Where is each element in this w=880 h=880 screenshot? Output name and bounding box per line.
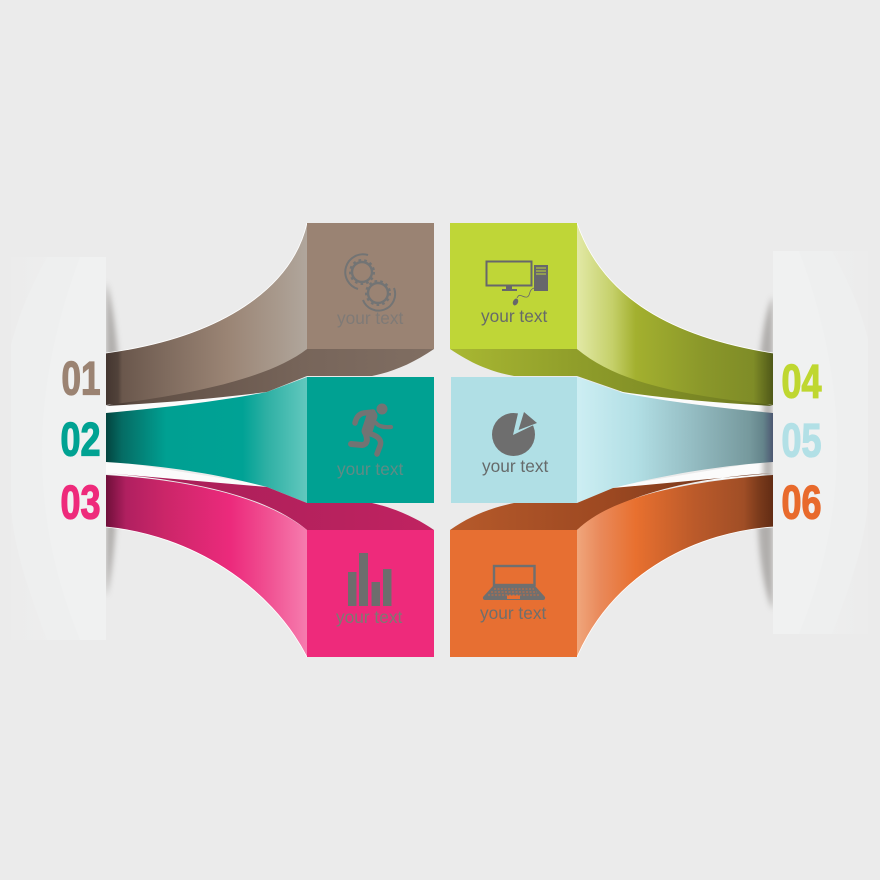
- box 02: [307, 377, 434, 503]
- number 04: 04: [782, 354, 822, 408]
- number 02: 02: [60, 412, 100, 466]
- box 05: [451, 377, 577, 503]
- ribbon 04: [450, 223, 773, 406]
- box 03: [307, 530, 434, 657]
- ribbon 04 highlight edge: [577, 223, 773, 353]
- right number panel: [773, 251, 868, 634]
- ribbon 06 highlight edge: [577, 527, 773, 657]
- box 06: [450, 530, 577, 657]
- ribbon 06: [450, 473, 773, 657]
- panel shadows: [106, 282, 773, 610]
- ribbon 04 front: [577, 223, 773, 405]
- ribbon 05: [577, 377, 773, 503]
- ribbon 03: [106, 473, 434, 657]
- label: your text: [480, 603, 546, 623]
- ribbon 06 top face: [450, 473, 773, 530]
- white gaps between ribbons: [106, 388, 773, 491]
- number 03: 03: [60, 476, 100, 528]
- left number panel: [11, 257, 106, 640]
- number 05: 05: [782, 414, 822, 466]
- ribbon 01: [106, 223, 434, 406]
- label: your text: [482, 456, 548, 476]
- icon: laptop: [483, 566, 545, 600]
- ribbon 01 highlight edge: [106, 223, 307, 353]
- ribbon 01 front: [106, 223, 307, 405]
- icon: bar chart: [348, 553, 392, 606]
- ribbon 01 underside: [106, 349, 434, 406]
- number 06: 06: [782, 476, 822, 528]
- label: your text: [337, 308, 403, 328]
- label: your text: [481, 306, 547, 326]
- ribbon 03 front: [106, 475, 307, 657]
- number 01: 01: [62, 352, 100, 404]
- label: your text: [337, 459, 403, 479]
- icon: pie chart: [492, 409, 542, 456]
- icon: desktop computer: [486, 262, 548, 306]
- icon: runner: [351, 404, 391, 454]
- ribbon 03 highlight edge: [106, 527, 307, 657]
- icon: gears: [345, 254, 395, 311]
- ribbon 02: [106, 377, 307, 503]
- box 04: [450, 223, 577, 349]
- ribbon 06 front: [577, 475, 773, 657]
- label: your text: [336, 607, 402, 627]
- ribbon 04 underside: [450, 349, 773, 406]
- box 01: [307, 223, 434, 349]
- ribbon 03 top face: [106, 473, 434, 530]
